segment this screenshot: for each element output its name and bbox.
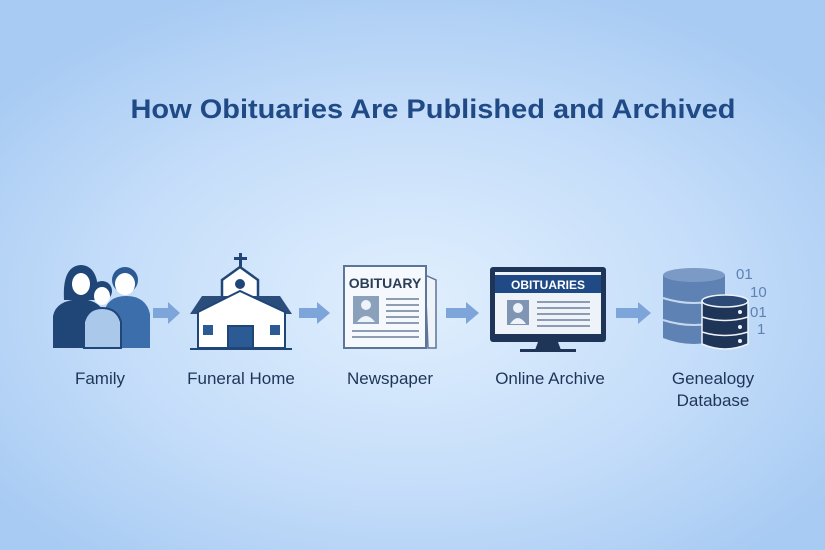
icon: family (53, 265, 150, 348)
icon: funeral home (190, 253, 292, 349)
labels: Genealogy (672, 369, 755, 388)
icon: monitor (490, 267, 606, 352)
labels: Database (677, 391, 749, 410)
arrow 1 (153, 302, 180, 324)
icon: database: 01 (750, 304, 767, 321)
labels (75, 369, 755, 410)
arrow 4 (616, 302, 651, 324)
arrow 2 (299, 302, 330, 324)
icon: database: 1 (757, 321, 765, 338)
labels: Family (75, 369, 126, 388)
arrow 3 (446, 302, 479, 324)
labels: Online Archive (495, 369, 605, 388)
title: How Obituaries Are Published and Archived (130, 94, 736, 124)
labels: Newspaper (347, 369, 433, 388)
labels: Funeral Home (187, 369, 295, 388)
icon: database: 10 (750, 284, 767, 301)
icon: newspaper (344, 266, 436, 348)
icon: newspaper: OBITUARY (349, 275, 422, 291)
icon: database: 01 (736, 266, 753, 283)
icon: database (663, 266, 767, 349)
icon: monitor: OBITUARIES (511, 278, 585, 292)
